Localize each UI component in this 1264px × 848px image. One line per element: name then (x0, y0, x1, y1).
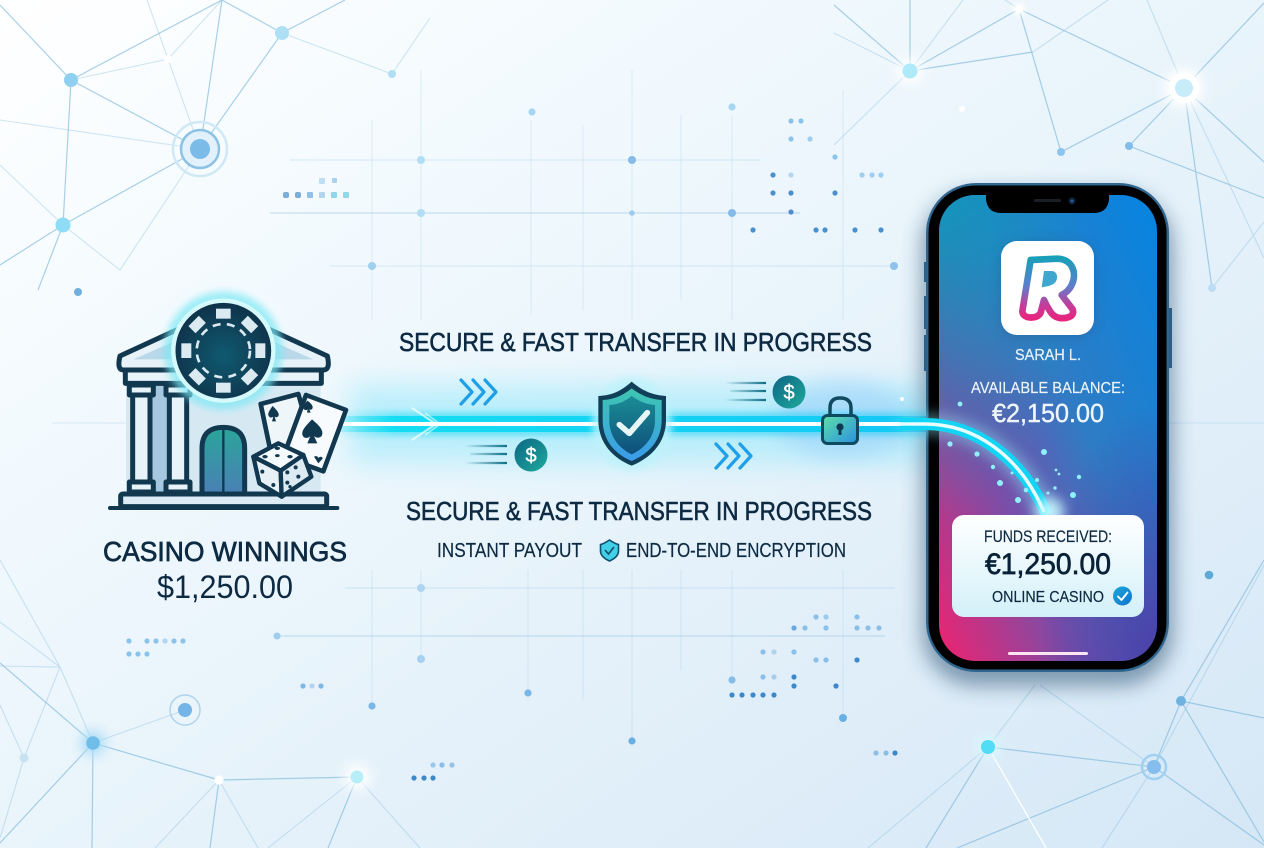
app icon (1001, 241, 1094, 337)
casino winnings label: $1,250.00 (157, 569, 293, 605)
funds received card: €1,250.00 (985, 548, 1111, 581)
building (110, 308, 337, 508)
verified check (1113, 586, 1132, 606)
dollar coin: bottom (465, 438, 548, 472)
feature: encryption: END-TO-END ENCRYPTION (626, 540, 846, 562)
dice (253, 443, 311, 497)
funds received card: ONLINE CASINO (992, 589, 1104, 606)
screen (939, 195, 1157, 661)
dollar coin: bottom: $ (525, 445, 537, 467)
casino winnings label: CASINO WINNINGS (103, 536, 347, 567)
transfer beam (340, 382, 940, 463)
heading: bottom: SECURE & FAST TRANSFER IN PROGRESS (406, 496, 872, 526)
phone (900, 183, 1173, 686)
sparkles (900, 397, 1081, 503)
padlock icon (822, 398, 858, 444)
shield icon (592, 377, 672, 471)
available balance (971, 380, 1125, 428)
dollar coin: top: $ (783, 382, 795, 404)
available balance: AVAILABLE BALANCE: (971, 380, 1125, 397)
account name: SARAH L. (1015, 347, 1081, 364)
poker chip (164, 291, 283, 410)
heading: top: SECURE & FAST TRANSFER IN PROGRESS (399, 327, 872, 357)
data dots (126, 118, 898, 781)
funds received card: FUNDS RECEIVED: (984, 527, 1112, 546)
casino winnings label (103, 536, 347, 605)
chevrons: bottom (716, 444, 751, 468)
funds received card (952, 515, 1144, 617)
side buttons (924, 262, 1172, 371)
dollar coin: top (725, 376, 806, 408)
notch (986, 194, 1109, 213)
available balance: €2,150.00 (992, 398, 1104, 428)
circuit grid background (52, 70, 1264, 741)
home bar (1008, 652, 1088, 655)
curved beam (900, 424, 1047, 515)
icon: small shield (600, 540, 618, 561)
chevrons: top (461, 380, 496, 404)
feature: instant payout: INSTANT PAYOUT (437, 540, 582, 562)
playing cards (261, 394, 346, 471)
casino icon (110, 291, 346, 508)
